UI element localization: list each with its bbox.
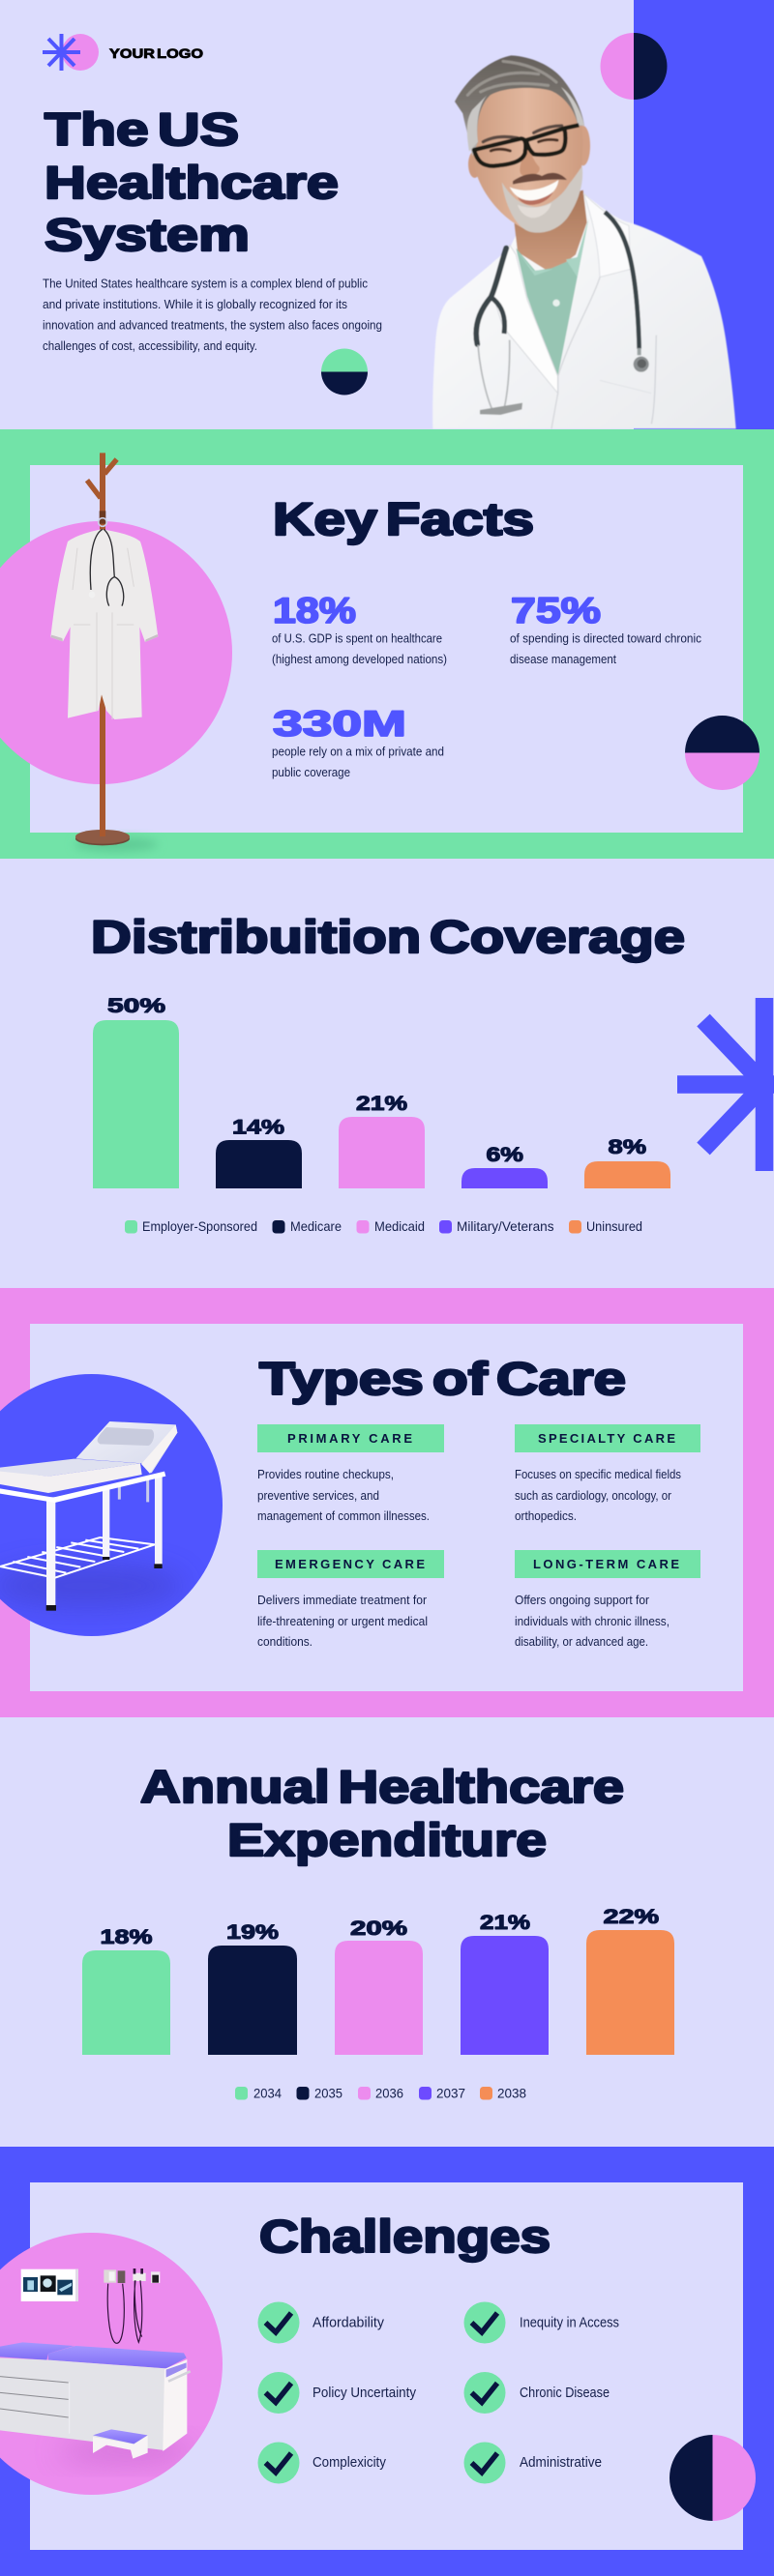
card: long-term care: disability, or advanced age. xyxy=(515,1634,648,1649)
title xyxy=(45,103,339,260)
logo text: YOUR LOGO xyxy=(109,45,203,61)
heading: Distribuition Coverage xyxy=(91,911,685,962)
card: emergency care xyxy=(257,1550,444,1649)
stat: 75%: 75% xyxy=(511,591,601,630)
stat: 75% xyxy=(510,591,701,666)
item: inequity in access: Inequity in Access xyxy=(520,2315,619,2330)
bar chart: coverage: 21% xyxy=(356,1093,407,1115)
legend: coverage: Medicaid xyxy=(374,1218,425,1234)
stat: 18% xyxy=(272,591,447,666)
card: emergency care: Delivers immediate treatment for xyxy=(257,1593,428,1607)
bar chart: coverage: 6% xyxy=(486,1144,523,1166)
bar chart: expenditure: 18% xyxy=(101,1926,153,1948)
decorative circle: green and navy xyxy=(321,348,368,395)
legend: years: 2038 xyxy=(497,2085,526,2100)
item: administrative xyxy=(464,2443,602,2483)
card: specialty care xyxy=(515,1424,700,1523)
item: inequity in access xyxy=(464,2301,619,2344)
rack pole xyxy=(94,453,111,836)
bar chart: expenditure xyxy=(82,1906,674,2055)
card: specialty care: orthopedics. xyxy=(515,1508,577,1523)
card: primary care: PRIMARY CARE xyxy=(287,1431,412,1446)
card: long-term care xyxy=(515,1550,700,1649)
bar chart: expenditure: 19% xyxy=(226,1921,279,1944)
bar chart: coverage: 8% xyxy=(608,1136,646,1158)
item: affordability xyxy=(257,2301,384,2344)
stat: 330M: public coverage xyxy=(272,765,350,779)
stat: 330M: 330M xyxy=(273,704,406,744)
bed seat xyxy=(0,1459,140,1477)
card: long-term care: Offers ongoing support for xyxy=(515,1593,650,1607)
bar chart: expenditure: 22% xyxy=(604,1906,659,1928)
bar chart: coverage xyxy=(93,995,670,1188)
legend: years: 2037 xyxy=(436,2085,465,2100)
card: primary care: management of common illnesses. xyxy=(257,1508,430,1523)
blue circle xyxy=(0,1374,223,1636)
card: long-term care: individuals with chronic illness, xyxy=(515,1614,670,1628)
bar chart: coverage: 50% xyxy=(107,995,165,1017)
item: complexicity: Complexicity xyxy=(313,2454,386,2471)
card: primary care xyxy=(257,1424,444,1523)
bar chart: coverage: 14% xyxy=(232,1116,284,1139)
icon: large asterisk xyxy=(677,998,774,1171)
bed pillow xyxy=(98,1427,154,1446)
bed legs xyxy=(119,1479,148,1502)
stat: 18%: (highest among developed nations) xyxy=(272,652,447,666)
mouth xyxy=(510,180,558,201)
card: specialty care: Focuses on specific medical fields xyxy=(515,1467,681,1481)
card: primary care: Provides routine checkups, xyxy=(257,1467,394,1481)
lapels xyxy=(492,245,558,394)
exam table cushions xyxy=(0,2342,74,2360)
card: primary care: preventive services, and xyxy=(257,1488,379,1503)
exam room illustration xyxy=(0,2269,191,2459)
stat: 18%: 18% xyxy=(273,591,356,630)
legend: coverage: Medicare xyxy=(290,1218,342,1234)
stat: 18%: of U.S. GDP is spent on healthcare xyxy=(272,630,442,646)
x-ray frame xyxy=(21,2269,78,2301)
hair xyxy=(455,55,584,157)
heading: Types of Care xyxy=(259,1353,626,1404)
item: chronic disease: Chronic Disease xyxy=(520,2385,610,2401)
item: chronic disease xyxy=(464,2372,610,2414)
pink circle xyxy=(0,521,232,784)
coat stethoscope xyxy=(90,529,124,606)
mustache xyxy=(513,173,567,185)
title: System xyxy=(45,209,250,260)
bar chart: expenditure: 21% xyxy=(480,1912,530,1934)
coat rack illustration xyxy=(50,453,158,852)
title: Healthcare xyxy=(45,157,339,208)
bar chart: expenditure: 20% xyxy=(350,1917,407,1940)
card: specialty care: such as cardiology, oncology, or xyxy=(515,1488,672,1503)
card: emergency care: life-threatening or urgent medical xyxy=(257,1614,428,1628)
doctor portrait xyxy=(432,55,736,428)
face xyxy=(470,82,582,232)
card: emergency care: conditions. xyxy=(257,1634,313,1649)
legend: coverage: Employer-Sponsored xyxy=(142,1218,257,1234)
step stool xyxy=(93,2429,148,2444)
stat: 330M xyxy=(272,704,444,779)
nose xyxy=(520,145,540,176)
heading xyxy=(140,1761,624,1865)
stethoscope xyxy=(476,249,506,344)
item: policy uncertainty xyxy=(257,2372,416,2414)
stat: 75%: disease management xyxy=(510,652,616,666)
exam table body xyxy=(0,2357,166,2450)
legend: coverage xyxy=(125,1218,642,1234)
bed headrest xyxy=(75,1421,177,1473)
intro paragraph: innovation and advanced treatments, the system also faces ongoing xyxy=(43,317,382,333)
intro paragraph: challenges of cost, accessibility, and equity. xyxy=(43,338,257,353)
legend: years: 2035 xyxy=(314,2085,342,2100)
logo icon xyxy=(43,34,99,71)
item: affordability: Affordability xyxy=(313,2315,384,2330)
pink circle xyxy=(0,2233,223,2495)
logo xyxy=(43,34,203,71)
intro paragraph: The United States healthcare system is a complex blend of public xyxy=(43,277,368,290)
panel: challenges xyxy=(0,2147,774,2576)
stat: 330M: people rely on a mix of private and xyxy=(272,745,444,758)
exam bed illustration xyxy=(0,1421,177,1611)
title: The US xyxy=(45,103,239,155)
legend: coverage: Uninsured xyxy=(586,1218,642,1234)
legend: coverage: Military/Veterans xyxy=(457,1218,553,1234)
card: specialty care: SPECIALTY CARE xyxy=(538,1431,675,1446)
item: complexicity xyxy=(257,2443,386,2483)
ears xyxy=(468,151,481,178)
legend: years: 2034 xyxy=(253,2085,282,2100)
rack base xyxy=(74,837,158,852)
glasses xyxy=(474,125,579,166)
heading: Challenges xyxy=(259,2210,551,2262)
panel: distribution coverage xyxy=(91,911,774,1234)
decorative circle: navy and pink xyxy=(670,2435,756,2521)
wall instruments xyxy=(104,2269,160,2343)
item: administrative: Administrative xyxy=(520,2454,602,2471)
card: emergency care: EMERGENCY CARE xyxy=(275,1557,425,1571)
legend: years: 2036 xyxy=(375,2085,403,2100)
bed frame xyxy=(0,1472,165,1503)
panel: hero xyxy=(0,0,774,429)
eyebrows and eyes xyxy=(483,126,562,142)
intro paragraph xyxy=(43,277,382,353)
heading: Expenditure xyxy=(227,1814,547,1865)
heading: Annual Healthcare xyxy=(140,1761,624,1812)
item: policy uncertainty: Policy Uncertainty xyxy=(313,2385,416,2401)
intro paragraph: and private institutions. While it is globally recognized for its xyxy=(43,297,347,311)
bed shelf xyxy=(0,1537,155,1578)
heading: Key Facts xyxy=(273,493,534,544)
coat body xyxy=(432,193,736,428)
lab coat xyxy=(50,529,158,719)
panel: annual healthcare expenditure xyxy=(82,1761,674,2100)
beard xyxy=(502,166,582,233)
stat: 75%: of spending is directed toward chronic xyxy=(510,630,701,646)
blue side band xyxy=(634,0,774,429)
panel: key facts xyxy=(0,429,774,859)
legend: years xyxy=(235,2085,526,2100)
neck xyxy=(513,190,587,274)
panel: types of care xyxy=(0,1288,774,1717)
decorative circle: pink and navy xyxy=(600,33,668,100)
decorative circle: navy and pink xyxy=(685,716,759,790)
card: long-term care: LONG-TERM CARE xyxy=(533,1557,679,1571)
shirt xyxy=(516,220,588,375)
